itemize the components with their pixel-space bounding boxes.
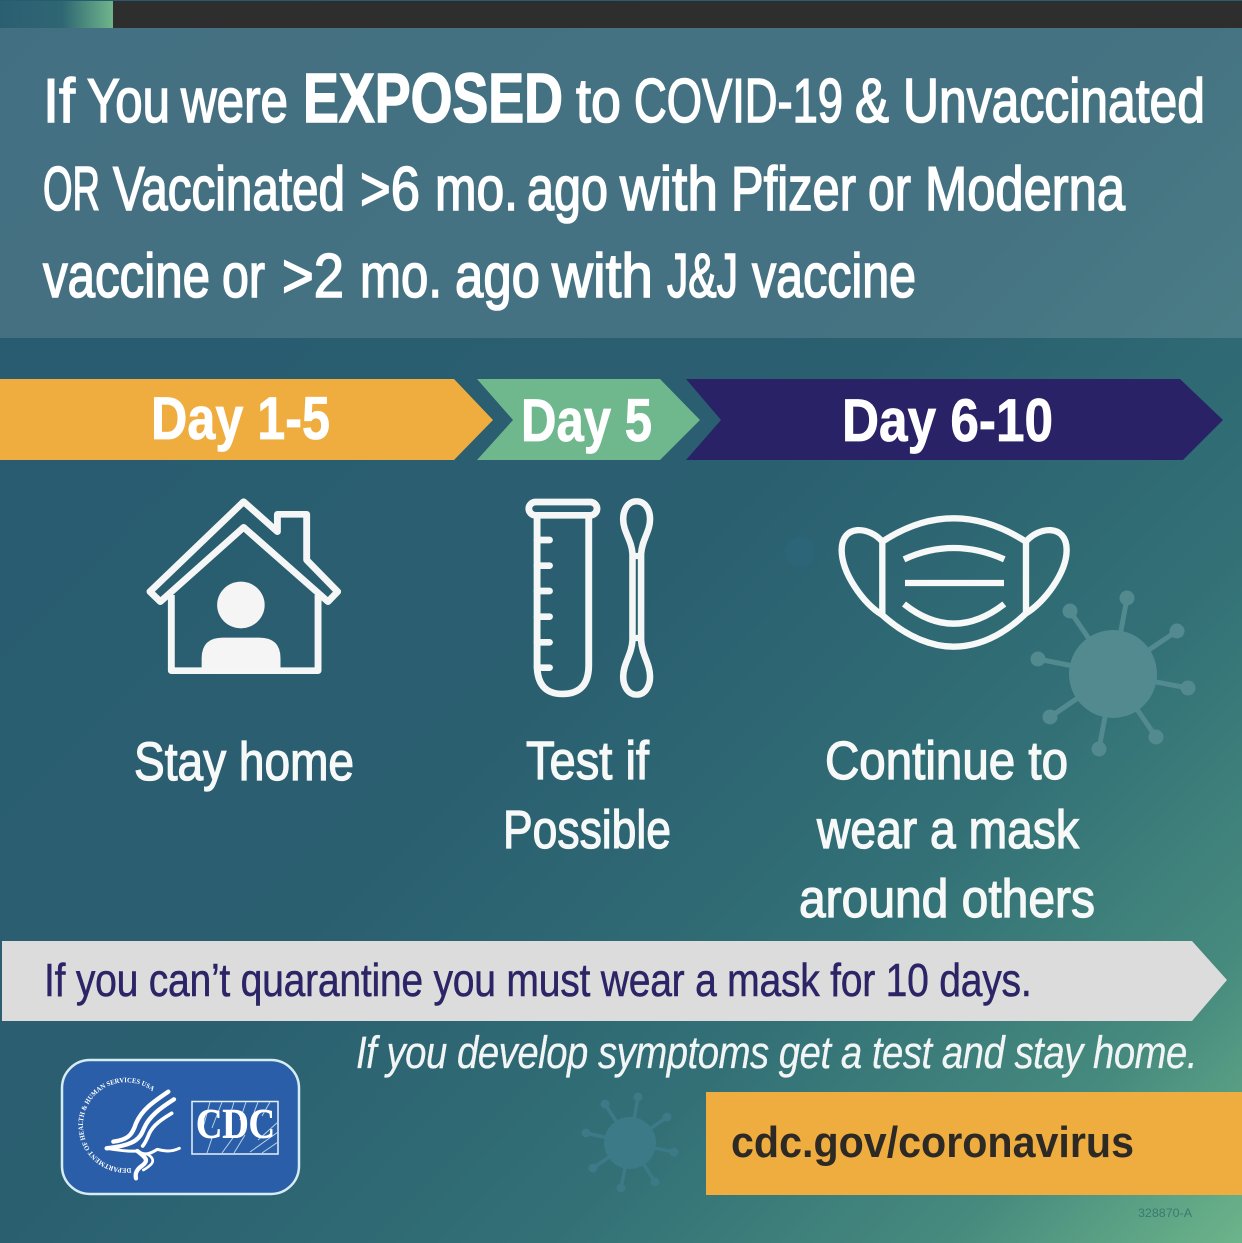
seal text: DEPARTMENT OF HEALTH & HUMAN SERVICES USA [78, 1078, 154, 1173]
CDC box: CDC [196, 1102, 275, 1148]
title: If [43, 67, 76, 136]
title: mo. [360, 242, 442, 311]
title: were [180, 67, 288, 136]
top bar [0, 1, 1242, 28]
icon: swab [623, 501, 650, 695]
title: ago [455, 242, 540, 311]
title: ago [527, 155, 608, 224]
title: vaccine [752, 242, 916, 311]
url box: cdc.gov/coronavirus [731, 1118, 1134, 1167]
label: test if possible: Possible [503, 800, 671, 860]
icon: test tube [529, 502, 597, 694]
title: COVID-19 [634, 67, 843, 136]
icon: face mask [842, 518, 1067, 647]
title: You [87, 67, 170, 136]
title: or [868, 155, 911, 224]
title [43, 59, 1205, 311]
arrow: Day 1-5 [0, 379, 493, 460]
title: with [619, 155, 718, 224]
icon: eagle [107, 1092, 179, 1178]
label: continue to wear a mask [799, 731, 1095, 929]
label: continue to wear a mask: wear a mask [816, 800, 1080, 860]
title: or [222, 242, 265, 311]
arrow: Day 5: Day 5 [521, 387, 652, 454]
title: Vaccinated [113, 155, 345, 224]
title: to [576, 67, 621, 136]
url box [706, 1092, 1242, 1195]
title panel [0, 28, 1242, 338]
arrow: Day 6-10 [686, 379, 1223, 460]
title: & [855, 67, 889, 136]
title: >2 [282, 242, 344, 311]
publication code: 328870-A [1138, 1206, 1192, 1220]
icon: virus small [582, 1092, 678, 1192]
label: stay home: Stay home [134, 732, 354, 792]
label: continue to wear a mask: around others [799, 869, 1095, 929]
title: with [551, 242, 653, 311]
title: mo. [435, 155, 518, 224]
italic note: If you develop symptoms get a test and stay home. [356, 1027, 1198, 1078]
arrow: Day 5 [477, 379, 700, 460]
icon: virus large [1030, 590, 1196, 756]
title: J&J [667, 242, 738, 311]
title: EXPOSED [303, 59, 563, 137]
banner: quarantine [2, 941, 1227, 1021]
arrow: Day 1-5: Day 1-5 [151, 385, 330, 452]
faint dot [785, 537, 815, 567]
icon: house with person [150, 502, 338, 671]
title: Pfizer [731, 155, 856, 224]
banner: quarantine: If you can’t quarantine you must wear a mask for 10 days. [44, 955, 1032, 1007]
logo: HHS and CDC [60, 1058, 300, 1196]
label: continue to wear a mask: Continue to [825, 731, 1068, 791]
title: vaccine [43, 242, 210, 311]
arrow: Day 6-10: Day 6-10 [842, 387, 1053, 454]
label: test if possible [503, 731, 671, 860]
title: Moderna [925, 155, 1125, 224]
title: >6 [360, 155, 420, 224]
title: OR [43, 155, 100, 224]
label: test if possible: Test if [526, 731, 650, 791]
